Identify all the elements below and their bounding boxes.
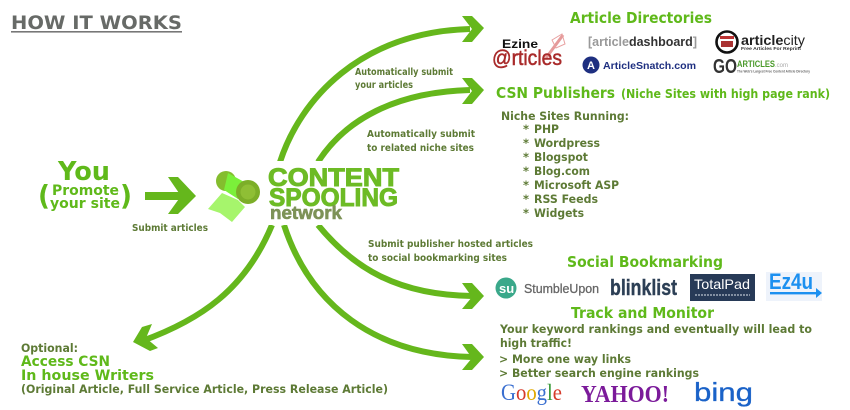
label: submit to niche sites [367,129,475,154]
list: niche sites running: Microsoft ASP [534,178,619,192]
label: submit your articles: your articles [355,80,413,91]
list: niche sites running: * [523,164,529,178]
heading: CSN publishers [496,84,830,102]
logo: go articles: GO [713,56,737,78]
list: niche sites running: Blog.com [534,164,590,178]
logo: totalpad: TotalPad [694,276,750,292]
list: niche sites running: Niche Sites Running: [501,109,629,123]
label: submit your articles [355,67,453,91]
list: niche sites running: Widgets [534,206,584,220]
logo: article dashboard: [articledashboard] [588,34,697,49]
logo: content spooling network: network [270,203,343,223]
text: track and monitor details: > More one way links [499,352,631,366]
heading: CSN publishers: CSN Publishers [496,84,615,102]
arrow: to CSN publishers [318,78,484,162]
logo: content spooling network [205,161,410,225]
arrow: to article directories [280,16,484,162]
logo: go articles: .com [775,63,788,69]
heading: article directories: Article Directories [570,9,712,27]
label: submit to bookmarking: Submit publisher hosted articles [368,239,533,250]
you block: Promote [52,183,119,199]
logo: ez4u: Ez4u [769,269,813,294]
icon: paper spool [208,171,260,222]
logo: stumbleupon: su [499,281,514,296]
list: niche sites running: Blogspot [534,150,588,164]
you block: ( [38,179,50,212]
list: niche sites running: * [523,178,529,192]
title: HOW IT WORKS [11,12,182,34]
logo: content spooling network: SPOOLING [269,184,398,212]
text: optional writers [21,341,388,396]
label: submit articles: Submit articles [132,223,208,234]
logo: go articles [713,56,810,78]
label: submit your articles: Automatically submit [355,67,453,78]
list: niche sites running: * [523,122,529,136]
logo: blinklist: blinklist [610,275,678,300]
logo: yahoo: YAHOO! [581,382,669,408]
logo: totalpad [690,274,755,301]
label: submit to bookmarking: to social bookmarking sites [368,253,507,264]
list: niche sites running: Wordpress [534,136,600,150]
label: submit to niche sites: Automatically submit [367,129,475,140]
list: niche sites running: * [523,150,529,164]
logo: go articles: The Web's Largest Free Content Article Directory [737,70,810,74]
you block: You [57,157,110,187]
logo: ezine articles [492,34,565,70]
you block [38,157,132,212]
list: niche sites running: * [523,192,529,206]
logo: google: Google [501,380,562,405]
list: niche sites running: * [523,206,529,220]
arrow: to social bookmarking [318,225,484,309]
you block: ) [120,179,132,212]
logo: stumbleupon [496,278,599,298]
arrow: to in-house writers [133,225,272,351]
text: optional writers: (Original Article, Full Service Article, Press Release Article) [21,382,388,396]
logo: content spooling network: CONTENT [268,164,399,192]
list: niche sites running: PHP [534,122,559,136]
you block: your site [50,196,120,212]
text: optional writers: Optional: [21,341,78,355]
text: track and monitor details: Your keyword rankings and eventually will lead to [499,322,812,336]
list: niche sites running: RSS Feeds [534,192,598,206]
logo: article snatch: ArticleSnatch.com [603,60,696,72]
label: submit to niche sites: to related niche sites [367,143,474,154]
logo: ezine articles: Ezine [502,37,538,51]
text: track and monitor details: high traffic! [500,336,572,350]
list: niche sites running: * [523,136,529,150]
logo: stumbleupon: StumbleUpon [524,281,599,296]
heading: track and monitor: Track and Monitor [571,304,715,322]
text: optional writers: In house Writers [21,368,154,384]
logo: article snatch [582,56,696,74]
text: optional writers: Access CSN [21,354,110,370]
arrow: to track and monitor [284,225,484,370]
logo: ezine articles: @rticles [492,47,562,70]
logo: bing: bing [694,377,753,407]
logo: article city: Free Articles For Reprint [741,46,802,51]
logo: go articles: ARTICLES [737,59,775,69]
heading: CSN publishers: (Niche Sites with high page rank) [621,87,830,101]
arrow: you to network [145,177,196,214]
text: track and monitor details [499,322,812,380]
list: niche sites running [501,109,629,220]
label: submit to bookmarking [368,239,533,264]
heading: social bookmarking: Social Bookmarking [567,253,723,271]
text: track and monitor details: > Better search engine rankings [499,366,699,380]
logo: article snatch: A [587,60,595,72]
logo: article city [716,32,805,52]
logo: article city: articlecity [741,32,805,48]
